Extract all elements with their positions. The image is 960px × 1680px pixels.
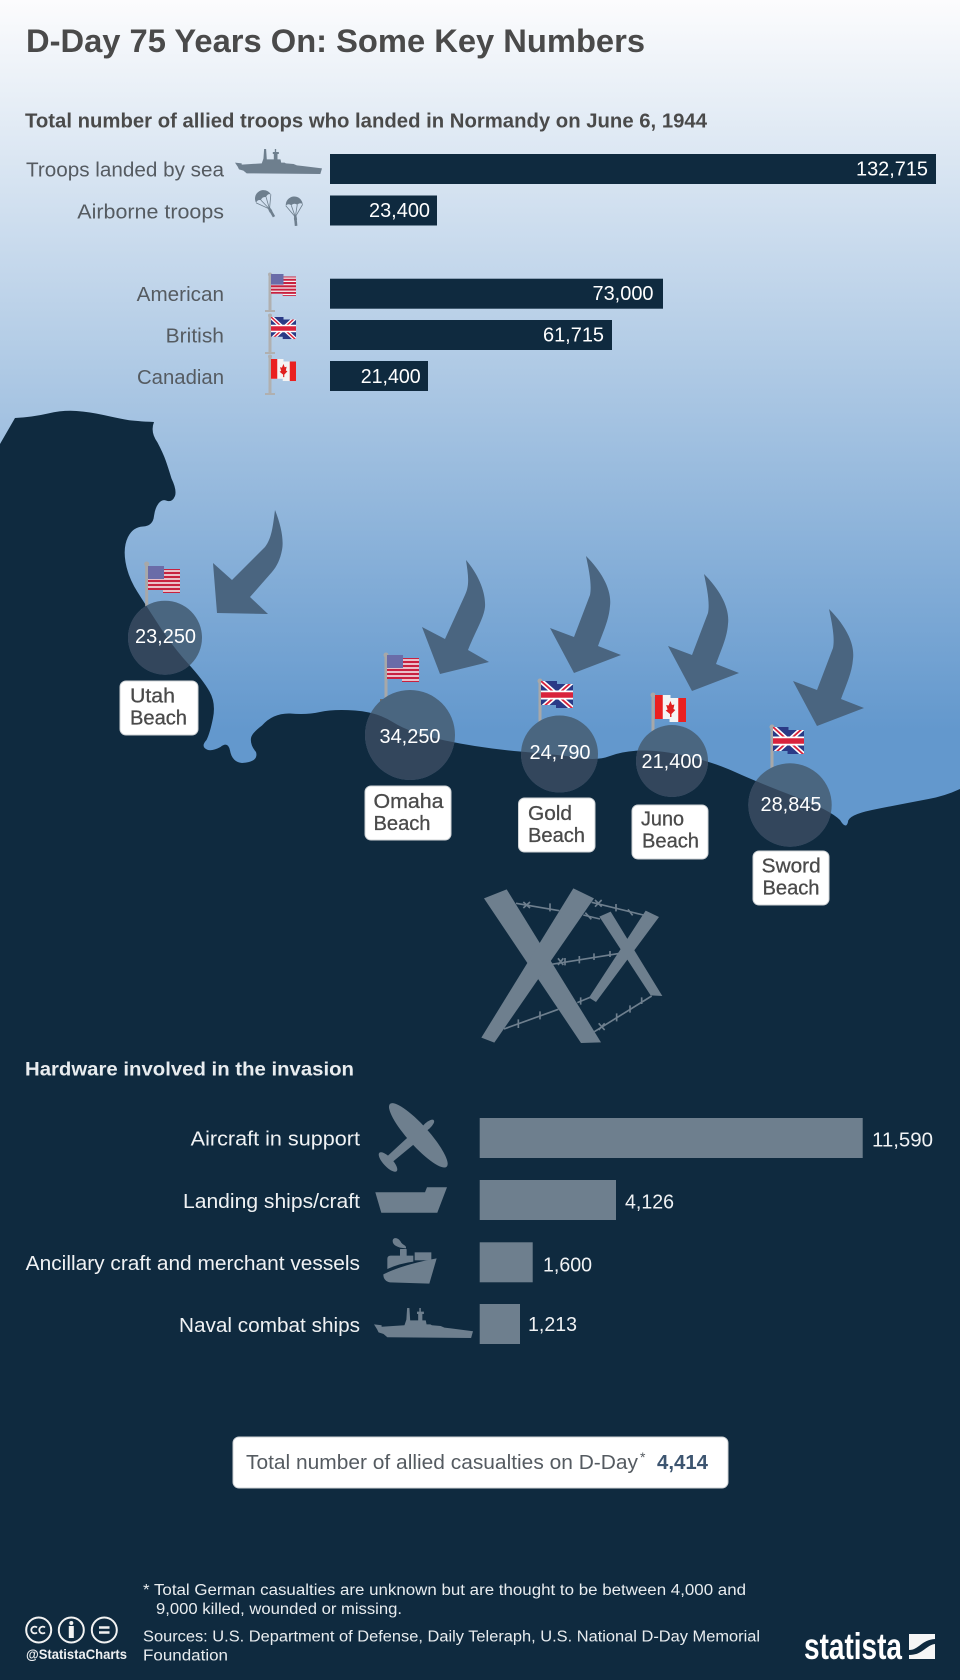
row: ancillary craft: Ancillary craft and merchant vessels <box>26 1253 360 1275</box>
row: Canadian: Canadian <box>137 367 224 389</box>
heading: hardware section: Hardware involved in the invasion <box>25 1058 354 1080</box>
bar chart: hardware involved <box>26 1097 933 1344</box>
footnote: German casualties <box>143 1582 746 1618</box>
row: naval combat ships: 1,213 <box>528 1314 577 1336</box>
icon: barbed wire obstacles <box>481 888 662 1043</box>
handle: StatistaCharts: @StatistaCharts <box>26 1647 127 1662</box>
beach marker: Juno: Beach <box>642 831 699 853</box>
callout: allied casualties: Total number of allied casualties on D-Day <box>246 1452 638 1474</box>
icon: creative commons licence <box>26 1618 117 1642</box>
row: landing ships <box>183 1180 674 1220</box>
beach marker: Sword <box>748 724 832 905</box>
beach marker: Juno <box>632 692 708 859</box>
source note <box>143 1629 760 1665</box>
row: British <box>166 314 612 354</box>
callout: allied casualties: 4,414 <box>657 1452 709 1474</box>
arrows: landing directions <box>213 510 864 726</box>
row: airborne troops: 23,400 <box>369 200 430 222</box>
subtitle: troops heading: Total number of allied troops who landed in Normandy on June 6, 1944 <box>25 110 708 132</box>
beach marker: Utah <box>120 562 202 735</box>
bar chart: troops by nationality <box>137 272 663 395</box>
source note: Sources: U.S. Department of Defense, Daily Teleraph, U.S. National D-Day Memorial <box>143 1629 760 1646</box>
beach marker: Gold: Gold <box>528 803 572 825</box>
beach marker: Omaha: Omaha <box>374 791 444 813</box>
footnote: German casualties: 9,000 killed, wounded or missing. <box>156 1601 402 1618</box>
beach marker: Utah: Beach <box>130 708 187 730</box>
row: British: British <box>166 326 224 348</box>
row: naval combat ships <box>179 1304 577 1344</box>
row: troops landed by sea: 132,715 <box>856 158 928 180</box>
row: troops landed by sea <box>26 149 936 184</box>
row: ancillary craft: 1,600 <box>543 1255 592 1277</box>
beach marker: Juno: Juno <box>641 809 684 831</box>
footnote: German casualties: * Total German casualties are unknown but are thought to be between 4,000 and <box>143 1582 746 1599</box>
arrow: towards Gold <box>550 556 621 673</box>
arrow: towards Sword <box>793 609 864 726</box>
row: airborne troops: Airborne troops <box>77 202 224 224</box>
logo: statista: statista <box>804 1626 902 1667</box>
row: American: 73,000 <box>592 283 654 305</box>
row: aircraft in support: 11,590 <box>872 1130 933 1152</box>
beach marker: Sword: 28,845 <box>760 794 822 816</box>
row: Canadian: 21,400 <box>361 366 421 388</box>
row: landing ships: 4,126 <box>625 1192 674 1214</box>
row: airborne troops <box>77 187 437 227</box>
arrow: towards Omaha <box>422 560 489 674</box>
beach marker: Gold: Beach <box>528 825 585 847</box>
row: American: American <box>137 284 224 306</box>
row: British: 61,715 <box>543 324 604 346</box>
beach marker: Omaha: 34,250 <box>380 726 440 748</box>
source note: Foundation <box>143 1648 228 1665</box>
beach marker: Sword: Sword <box>762 856 821 878</box>
beach marker: Utah: Utah <box>130 686 175 708</box>
arrow: towards Utah <box>213 510 283 614</box>
row: aircraft in support <box>191 1097 933 1174</box>
row: American <box>137 272 663 312</box>
row: landing ships: Landing ships/craft <box>183 1191 360 1213</box>
bar chart: troops by arrival mode <box>26 149 936 227</box>
row: Canadian <box>137 354 428 395</box>
beach marker: Omaha <box>365 652 455 840</box>
beach marker: Sword: Beach <box>762 878 820 900</box>
arrow: towards Juno <box>668 574 739 691</box>
beach marker: Gold: 24,790 <box>530 742 590 764</box>
callout: allied casualties <box>233 1437 728 1488</box>
title: D-Day 75 Years On: Some Key Numbers <box>26 23 645 59</box>
row: aircraft in support: Aircraft in support <box>191 1129 360 1151</box>
beach marker: Juno: 21,400 <box>642 751 702 773</box>
row: naval combat ships: Naval combat ships <box>179 1315 360 1337</box>
beach marker: Utah: 23,250 <box>135 626 196 648</box>
callout: allied casualties: * <box>640 1449 646 1465</box>
beach marker: Omaha: Beach <box>374 813 430 835</box>
beach marker: Gold <box>518 678 598 852</box>
row: troops landed by sea: Troops landed by sea <box>26 160 225 182</box>
map: Normandy coastline land mass <box>0 411 960 1680</box>
row: ancillary craft <box>26 1238 592 1284</box>
